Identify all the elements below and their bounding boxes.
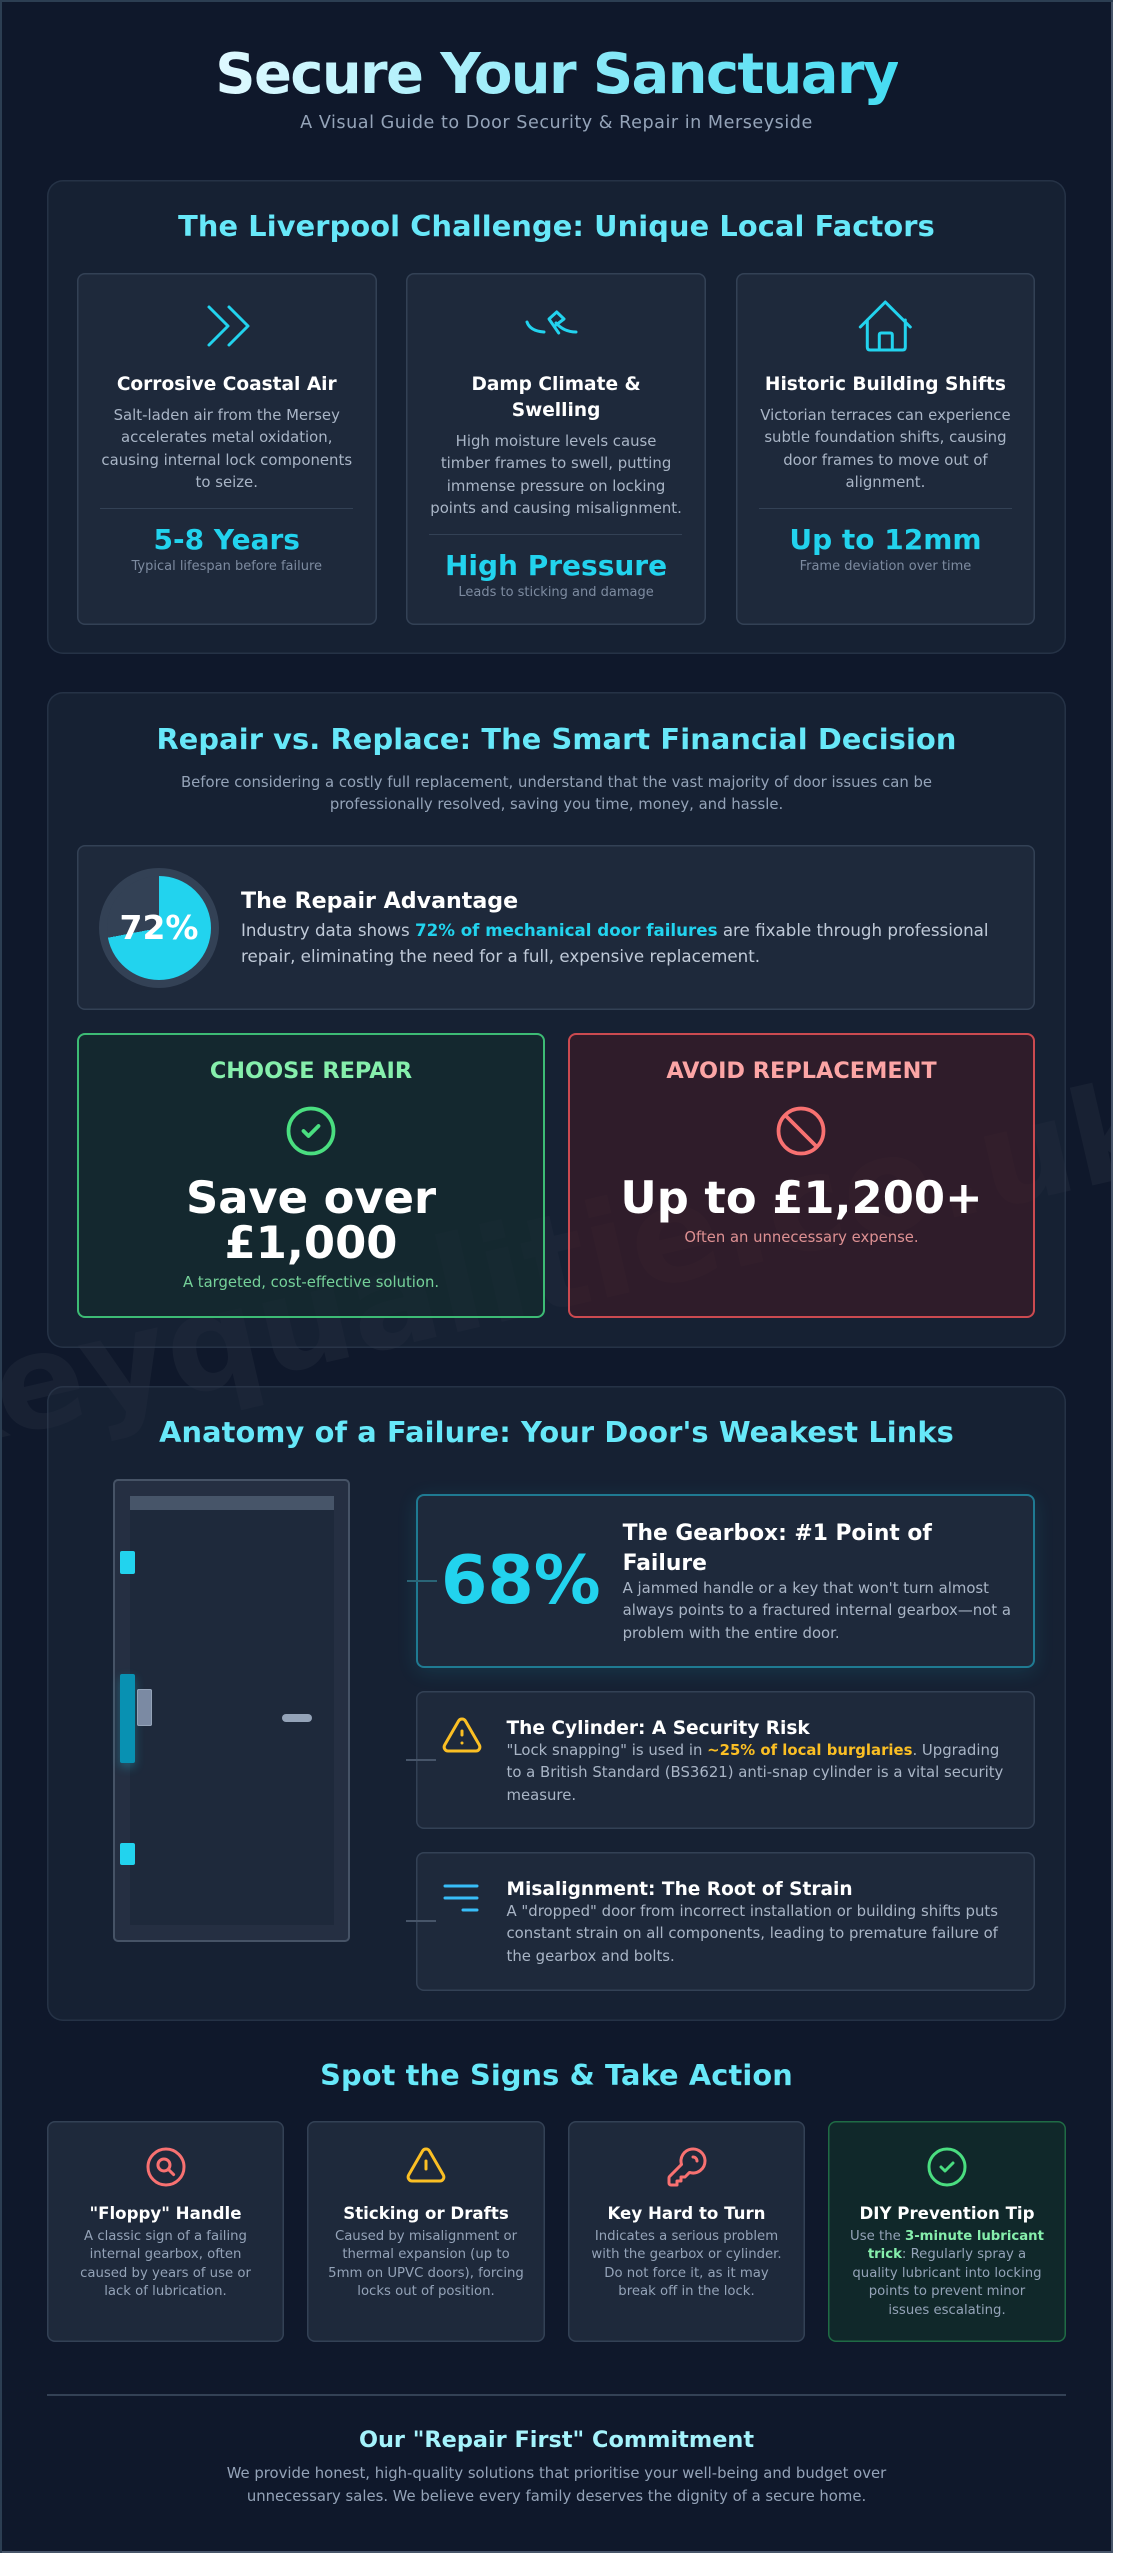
card heading: Swelling: [512, 400, 600, 421]
cylinder heading: The Cylinder: A Security Risk: [506, 1718, 810, 1738]
footer heading: Our "Repair First" Commitment: [359, 2427, 754, 2453]
door diagram: [113, 1479, 350, 1942]
icon: warning: [442, 1718, 482, 1752]
intro text: professionally resolved, saving you time, money, and hassle.: [330, 795, 783, 813]
replacement caption: Often an unnecessary expense.: [684, 1229, 919, 1246]
gearbox strip: [120, 1674, 135, 1763]
misalignment heading: Misalignment: The Root of Strain: [506, 1878, 853, 1900]
sign text: break off in the lock.: [618, 2284, 755, 2299]
card: avoid replacement: [568, 1033, 1035, 1318]
cylinder text: to a British Standard (BS3621) anti-snap cylinder is a vital security: [506, 1763, 1003, 1781]
footer: repair first commitment: [47, 2394, 1066, 2504]
footer text: We provide honest, high-quality solutions that prioritise your well-being and budget over: [227, 2464, 886, 2482]
card description: accelerates metal oxidation,: [121, 428, 332, 446]
sign text: [591, 2229, 782, 2299]
intro text: Before considering a costly full replacement, understand that the vast majority of door issues can be: [181, 773, 932, 791]
connector: cylinder: [406, 1759, 436, 1761]
statistic: Up to 12mm: [789, 523, 982, 556]
sign text: A classic sign of a failing: [84, 2229, 247, 2244]
gearbox text: A jammed handle or a key that won't turn almost: [623, 1579, 989, 1597]
advantage text: repair, eliminating the need for a full, expensive replacement.: [241, 946, 760, 966]
gearbox heading: The Gearbox: #1 Point of: [623, 1520, 932, 1546]
tip text: points to prevent minor: [869, 2284, 1025, 2299]
card: historic building shifts: [736, 273, 1035, 625]
sign heading: "Floppy" Handle: [89, 2204, 242, 2223]
card description: subtle foundation shifts, causing: [764, 428, 1007, 446]
card description: [101, 406, 352, 491]
panel: repair vs replace: [47, 692, 1066, 1348]
door leaf: [130, 1496, 334, 1925]
sign text: [328, 2229, 524, 2299]
card description: to seize.: [196, 473, 258, 491]
sign text: caused by years of use or: [80, 2266, 251, 2281]
card: the repair advantage: [77, 845, 1035, 1010]
card description: Victorian terraces can experience: [760, 406, 1011, 424]
sign text: locks out of position.: [357, 2284, 495, 2299]
card description: [430, 432, 682, 517]
card description: alignment.: [845, 473, 925, 491]
pie label: 72%: [120, 908, 198, 947]
icon: key: [668, 2148, 706, 2186]
icon: damp swelling: [526, 310, 578, 335]
sign text: Do not force it, as it may: [604, 2266, 769, 2281]
advantage heading: The Repair Advantage: [241, 888, 518, 914]
saving figure: [186, 1171, 436, 1269]
sign card: sticking or drafts: [307, 2121, 545, 2342]
icon: magnifier circle: [146, 2148, 186, 2186]
panel: anatomy of a failure: [47, 1386, 1066, 2021]
card heading: [471, 374, 641, 421]
saving figure: Save over: [186, 1171, 436, 1224]
icon: ban: [776, 1106, 826, 1156]
cylinder: [137, 1689, 152, 1726]
icon: check circle: [286, 1106, 336, 1156]
sign text: with the gearbox or cylinder.: [591, 2247, 782, 2262]
sign text: Indicates a serious problem: [595, 2229, 778, 2244]
card description: Salt-laden air from the Mersey: [114, 406, 340, 424]
heading: Liverpool challenge: The Liverpool Challenge: Unique Local Factors: [178, 209, 935, 243]
card description: High moisture levels cause: [456, 432, 656, 450]
gearbox text: always points to a fractured internal gearbox—not a: [623, 1601, 1011, 1619]
misalignment text: the gearbox and bolts.: [506, 1947, 675, 1965]
statistic caption: Typical lifespan before failure: [131, 559, 322, 574]
repair heading: CHOOSE REPAIR: [210, 1058, 412, 1084]
intro text: [181, 773, 932, 813]
icon: check circle: [928, 2148, 966, 2186]
pie chart: 72 percent: [99, 868, 219, 988]
feature card: gearbox: [416, 1494, 1035, 1668]
tip text: quality lubricant into locking: [852, 2266, 1042, 2281]
heading: repair vs replace: Repair vs. Replace: The Smart Financial Decision: [156, 722, 957, 756]
advantage text: [241, 920, 989, 966]
heading: anatomy: Anatomy of a Failure: Your Door's Weakest Links: [159, 1415, 954, 1449]
misalignment text: A "dropped" door from incorrect installation or building shifts puts: [506, 1902, 998, 1920]
card: corrosive coastal air: [77, 273, 376, 625]
statistic caption: Leads to sticking and damage: [458, 585, 654, 600]
sign card: floppy handle: [47, 2121, 284, 2342]
icon: double chevron: [207, 305, 250, 347]
statistic caption: Frame deviation over time: [800, 559, 971, 574]
title: Secure Your Sanctuary: [215, 42, 898, 107]
subtitle: A Visual Guide to Door Security & Repair in Merseyside: [300, 113, 813, 133]
card: choose repair: [77, 1033, 545, 1318]
sign text: Caused by misalignment or: [335, 2229, 517, 2244]
panel: the Liverpool challenge: [47, 180, 1066, 654]
card heading: Damp Climate &: [471, 374, 641, 395]
card: damp climate: [406, 273, 706, 625]
gearbox text: problem with the entire door.: [623, 1624, 840, 1642]
sign text: thermal expansion (up to: [342, 2247, 510, 2262]
misalignment text: [506, 1902, 998, 1965]
repair caption: A targeted, cost-effective solution.: [183, 1274, 439, 1291]
sign text: internal gearbox, often: [90, 2247, 241, 2262]
misalignment text: constant strain on all components, leading to premature failure of: [506, 1924, 998, 1942]
connector: misalignment: [406, 1920, 436, 1922]
cylinder text: "Lock snapping" is used in ~25% of local burglaries. Upgrading: [506, 1741, 999, 1759]
top hinge point: [120, 1551, 135, 1574]
feature card: misalignment: [416, 1852, 1035, 1991]
gearbox text: [622, 1579, 1011, 1642]
handle: [282, 1714, 312, 1722]
tip text: [850, 2229, 1044, 2318]
card heading: Corrosive Coastal Air: [117, 374, 337, 395]
feature card: cylinder: [416, 1691, 1035, 1829]
card description: door frames to move out of: [783, 451, 988, 469]
sign text: lack of lubrication.: [104, 2284, 227, 2299]
sign card: key hard to turn: [568, 2121, 805, 2342]
gearbox heading: [622, 1520, 932, 1576]
tip heading: DIY Prevention Tip: [859, 2204, 1035, 2223]
sign heading: Sticking or Drafts: [343, 2204, 509, 2223]
card description: immense pressure on locking: [447, 477, 665, 495]
heading: spot the signs: Spot the Signs & Take Action: [320, 2058, 793, 2092]
icon: house: [858, 300, 912, 352]
replacement cost: Up to £1,200+: [620, 1171, 983, 1224]
footer text: unnecessary sales. We believe every family deserves the dignity of a secure home.: [247, 2488, 866, 2504]
sign text: [80, 2229, 251, 2299]
saving figure: £1,000: [225, 1216, 397, 1269]
tip card: DIY prevention: [828, 2121, 1066, 2342]
tip text: trick: Regularly spray a: [868, 2247, 1026, 2262]
card description: [760, 406, 1011, 491]
connector: gearbox: [407, 1580, 437, 1582]
card description: causing internal lock components: [101, 451, 352, 469]
bottom hinge point: [120, 1843, 135, 1865]
tip text: Use the 3-minute lubricant: [850, 2229, 1044, 2244]
card heading: Historic Building Shifts: [765, 374, 1006, 395]
cylinder text: measure.: [506, 1786, 576, 1804]
icon: warning: [406, 2148, 446, 2182]
replacement heading: AVOID REPLACEMENT: [666, 1058, 937, 1084]
sign heading: Key Hard to Turn: [607, 2204, 766, 2223]
card description: timber frames to swell, putting: [441, 454, 671, 472]
figure: 68 percent: 68%: [441, 1541, 601, 1619]
gearbox heading: Failure: [623, 1550, 707, 1576]
statistic: 5-8 Years: [154, 523, 300, 556]
section: spot the signs: [47, 2058, 1066, 2342]
statistic: High Pressure: [445, 549, 667, 582]
advantage text: Industry data shows 72% of mechanical door failures are fixable through professional: [241, 920, 989, 940]
icon: misaligned lines: [444, 1884, 478, 1912]
card description: points and causing misalignment.: [430, 499, 682, 517]
sign text: 5mm on UPVC doors), forcing: [328, 2266, 524, 2281]
footer text: [227, 2464, 886, 2504]
top rail: [130, 1496, 334, 1510]
tip text: issues escalating.: [888, 2303, 1006, 2318]
cylinder text: [506, 1741, 1003, 1804]
